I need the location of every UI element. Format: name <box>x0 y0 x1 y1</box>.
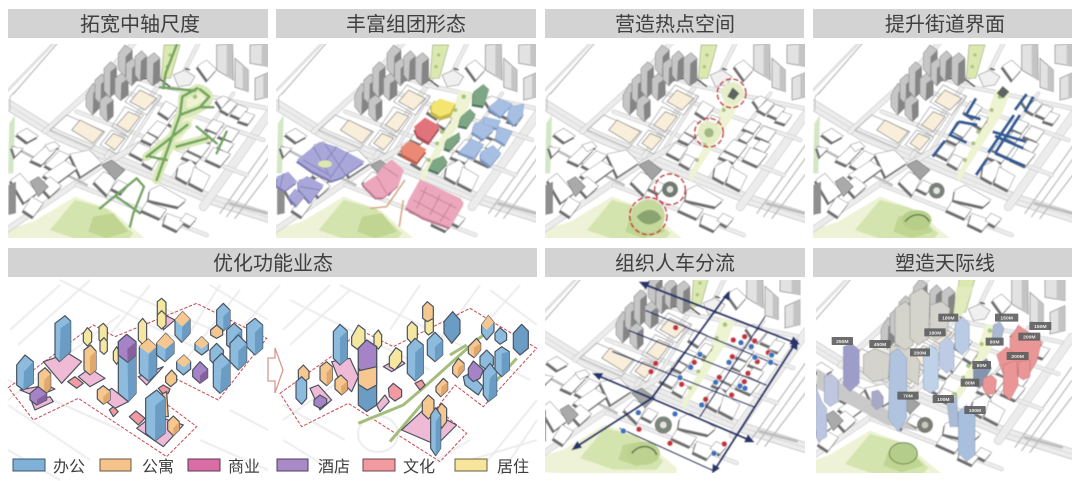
map: hot spots <box>545 44 805 238</box>
heading: create hot spots: 营造热点空间 <box>615 13 735 36</box>
height tags: 180M <box>942 316 955 322</box>
heading: enrich cluster forms <box>276 9 536 38</box>
heading: organise pedestrian and vehicle flows: 组织人车分流 <box>615 252 735 275</box>
map: street interfaces in blue <box>813 44 1072 238</box>
height tags: 80M <box>990 340 999 346</box>
legend item: office <box>13 458 85 476</box>
legend item: hotel: 酒店 <box>318 458 350 476</box>
legend item: culture: 文化 <box>403 458 435 476</box>
height tags: 80M <box>977 363 987 369</box>
panel: optimise functional mix <box>8 248 537 480</box>
legend item: hotel <box>277 458 350 476</box>
dashed boundary: after <box>280 308 537 462</box>
height tags: 200M <box>914 350 926 356</box>
blue street edges <box>933 94 1033 175</box>
arrows <box>575 283 797 471</box>
heading: improve street interfaces <box>813 9 1072 38</box>
podiums: after <box>310 358 457 445</box>
towers: after <box>296 302 528 456</box>
panel: organise pedestrian and vehicle flows <box>530 248 807 481</box>
legend item: apartment: 公寓 <box>142 458 174 476</box>
legend item: residential <box>455 458 529 476</box>
panel: improve street interfaces <box>813 9 1072 238</box>
legend item: commercial <box>188 458 260 476</box>
height tags: 250M <box>836 339 849 345</box>
massing: before <box>8 298 267 457</box>
legend <box>13 458 529 476</box>
blue dots <box>620 340 775 456</box>
map: circulation <box>545 280 805 473</box>
map: skyline massing <box>816 280 1072 473</box>
heading: create hot spots <box>545 9 804 38</box>
panel: enrich cluster forms <box>276 9 536 238</box>
height tags: 70M <box>903 394 913 400</box>
massing: after <box>280 302 537 462</box>
blue towers <box>816 317 1004 462</box>
legend item: office: 办公 <box>53 458 85 476</box>
legend item: residential: 居住 <box>497 458 529 476</box>
panel: widen the central axis <box>8 9 268 238</box>
walkways: after <box>358 328 517 442</box>
height tags: 80M <box>965 381 975 387</box>
red towers <box>983 325 1042 400</box>
legend item: apartment <box>100 458 174 476</box>
height tags: 200M <box>1011 354 1024 360</box>
heading: widen the central axis: 拓宽中轴尺度 <box>80 13 200 36</box>
heading: improve street interfaces: 提升街道界面 <box>885 13 1005 36</box>
height tags: 150M <box>1000 316 1013 322</box>
height tags: 180M <box>929 330 941 336</box>
map: central axis in green <box>8 44 268 238</box>
heading: organise pedestrian and vehicle flows <box>545 248 805 277</box>
heading: optimise functional mix <box>8 248 537 277</box>
arrow: before to after <box>268 348 283 393</box>
heading: enrich cluster forms: 丰富组团形态 <box>346 13 466 36</box>
grey mid-rise context <box>863 288 950 385</box>
height tags: 100M <box>969 408 981 414</box>
legend item: culture <box>363 458 435 476</box>
height tags: 450M <box>874 342 886 348</box>
height tags: 150M <box>1034 324 1047 330</box>
dashed boundary: before <box>8 303 267 457</box>
heading: widen the central axis <box>8 9 268 38</box>
red dots <box>636 325 771 447</box>
towers: before <box>17 298 263 441</box>
map: coloured building clusters <box>276 44 536 238</box>
panel: create hot spots <box>545 9 805 238</box>
hot spot circles <box>630 79 746 235</box>
podiums: before <box>20 313 183 447</box>
panel: shape the skyline <box>795 248 1072 481</box>
height tags <box>832 314 1051 414</box>
height tags: 200M <box>1023 335 1036 341</box>
heading: optimise functional mix: 优化功能业态 <box>213 252 333 275</box>
heading: shape the skyline: 塑造天际线 <box>895 252 995 275</box>
faint street context <box>8 280 537 480</box>
heading: shape the skyline <box>813 248 1072 277</box>
legend item: commercial: 商业 <box>228 458 260 476</box>
height tags: 100M <box>937 397 950 403</box>
